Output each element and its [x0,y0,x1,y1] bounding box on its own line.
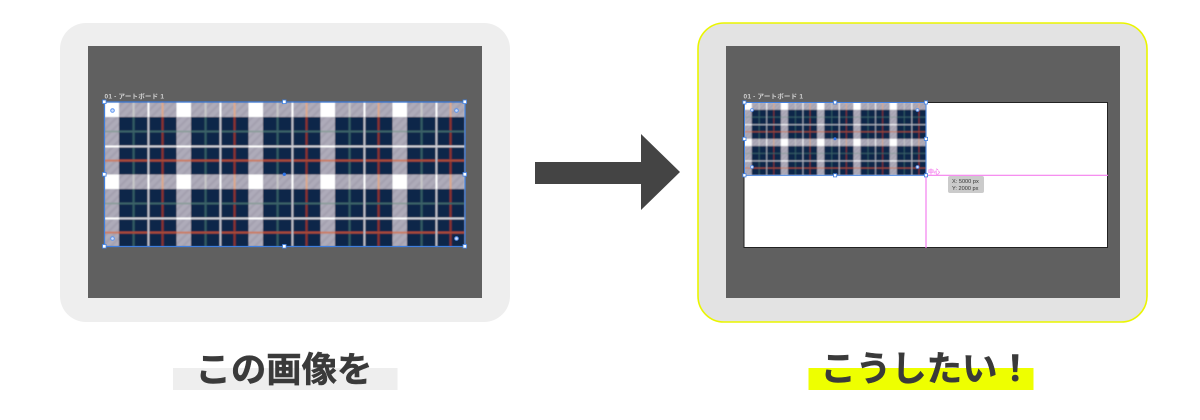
artboard label: after: 01 - アートボード 1 [744,92,803,100]
coordinates tooltip: Y: 2000 px [952,186,979,192]
artboard label: before: 01 - アートボード 1 [104,92,164,100]
smart guides [924,168,1108,248]
arrow [535,134,680,210]
coordinates tooltip: X: 5000 px [952,179,979,185]
white artboard [744,102,1108,248]
coordinates tooltip [948,176,984,193]
dark canvas: after [726,46,1120,298]
plaid image: before [102,100,467,248]
caption: after: こうしたい！ [820,349,1033,389]
panel: before [60,23,510,322]
dark canvas: before [88,46,482,298]
caption: before: この画像を [196,350,372,390]
panel: after [698,23,1147,322]
smart guides: 中心 [928,168,940,176]
plaid image: after [743,101,928,177]
